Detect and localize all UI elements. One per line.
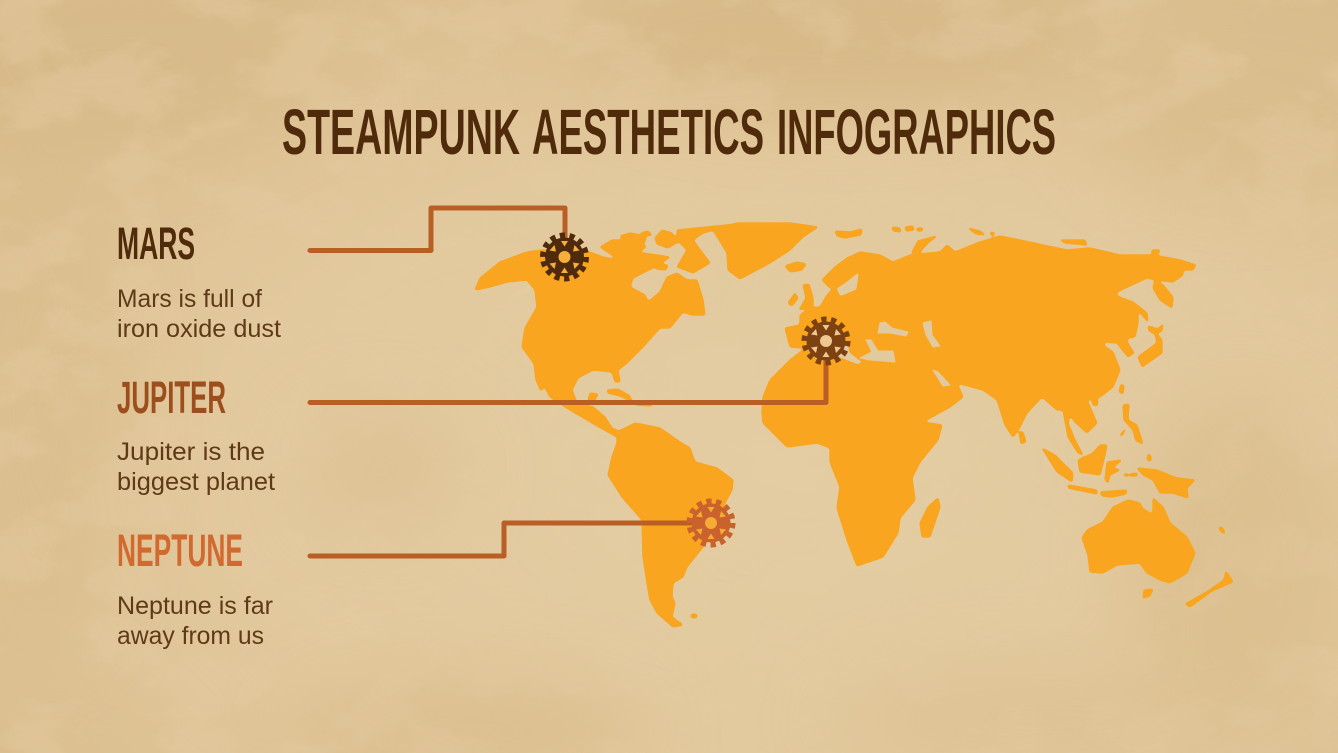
description: Mars (117, 285, 281, 343)
description: Neptune: Neptune is far (117, 592, 273, 620)
Black, Caspian and Mediterranean seas (860, 321, 950, 386)
Tasmania and New Zealand (1143, 527, 1233, 607)
text block: Jupiter (117, 372, 275, 496)
description: Mars: iron oxide dust (117, 315, 281, 343)
Greenland (713, 223, 818, 279)
title: AESTHETICS (532, 96, 764, 168)
Philippines (1120, 404, 1143, 444)
South America (608, 423, 733, 627)
Africa (762, 350, 942, 566)
icon: gear Neptune (690, 502, 732, 544)
Britain and Ireland (788, 284, 813, 310)
title: STEAMPUNK (282, 96, 520, 168)
Arctic islands (600, 224, 737, 273)
description: Mars: Mars is full of (117, 285, 262, 313)
Falkland islands (690, 614, 698, 618)
world map (475, 223, 1233, 627)
description: Neptune (117, 592, 273, 650)
icon: gear Jupiter (804, 320, 848, 362)
Japan (1138, 324, 1163, 367)
description: Jupiter (117, 438, 275, 496)
text block: Mars (117, 218, 281, 343)
description: Jupiter: Jupiter is the (117, 438, 265, 466)
Kamchatka (1153, 280, 1173, 308)
icon: gear Mars (543, 236, 586, 278)
title: INFOGRAPHICS (777, 96, 1056, 168)
Taiwan Hainan and Sri Lanka (1019, 384, 1124, 444)
connector: Mars (310, 208, 565, 250)
connector: Neptune (310, 523, 695, 556)
Iceland (785, 262, 806, 272)
Caribbean islands (588, 389, 652, 406)
Baja California (534, 364, 545, 391)
North America (475, 250, 705, 437)
Eurasia (785, 236, 1196, 455)
Australia (1082, 498, 1195, 583)
text block: Neptune (117, 525, 273, 650)
Svalbard and arctic islands (835, 226, 1160, 254)
description: Neptune: away from us (117, 622, 264, 650)
heading: Neptune: NEPTUNE (117, 525, 243, 576)
Madagascar (920, 498, 940, 537)
heading: Mars: MARS (117, 218, 195, 269)
description: Jupiter: biggest planet (117, 468, 275, 496)
connector: Jupiter (310, 360, 826, 402)
title (282, 96, 1056, 168)
Indonesia and New Guinea (1042, 445, 1195, 498)
heading: Jupiter: JUPITER (117, 372, 226, 423)
